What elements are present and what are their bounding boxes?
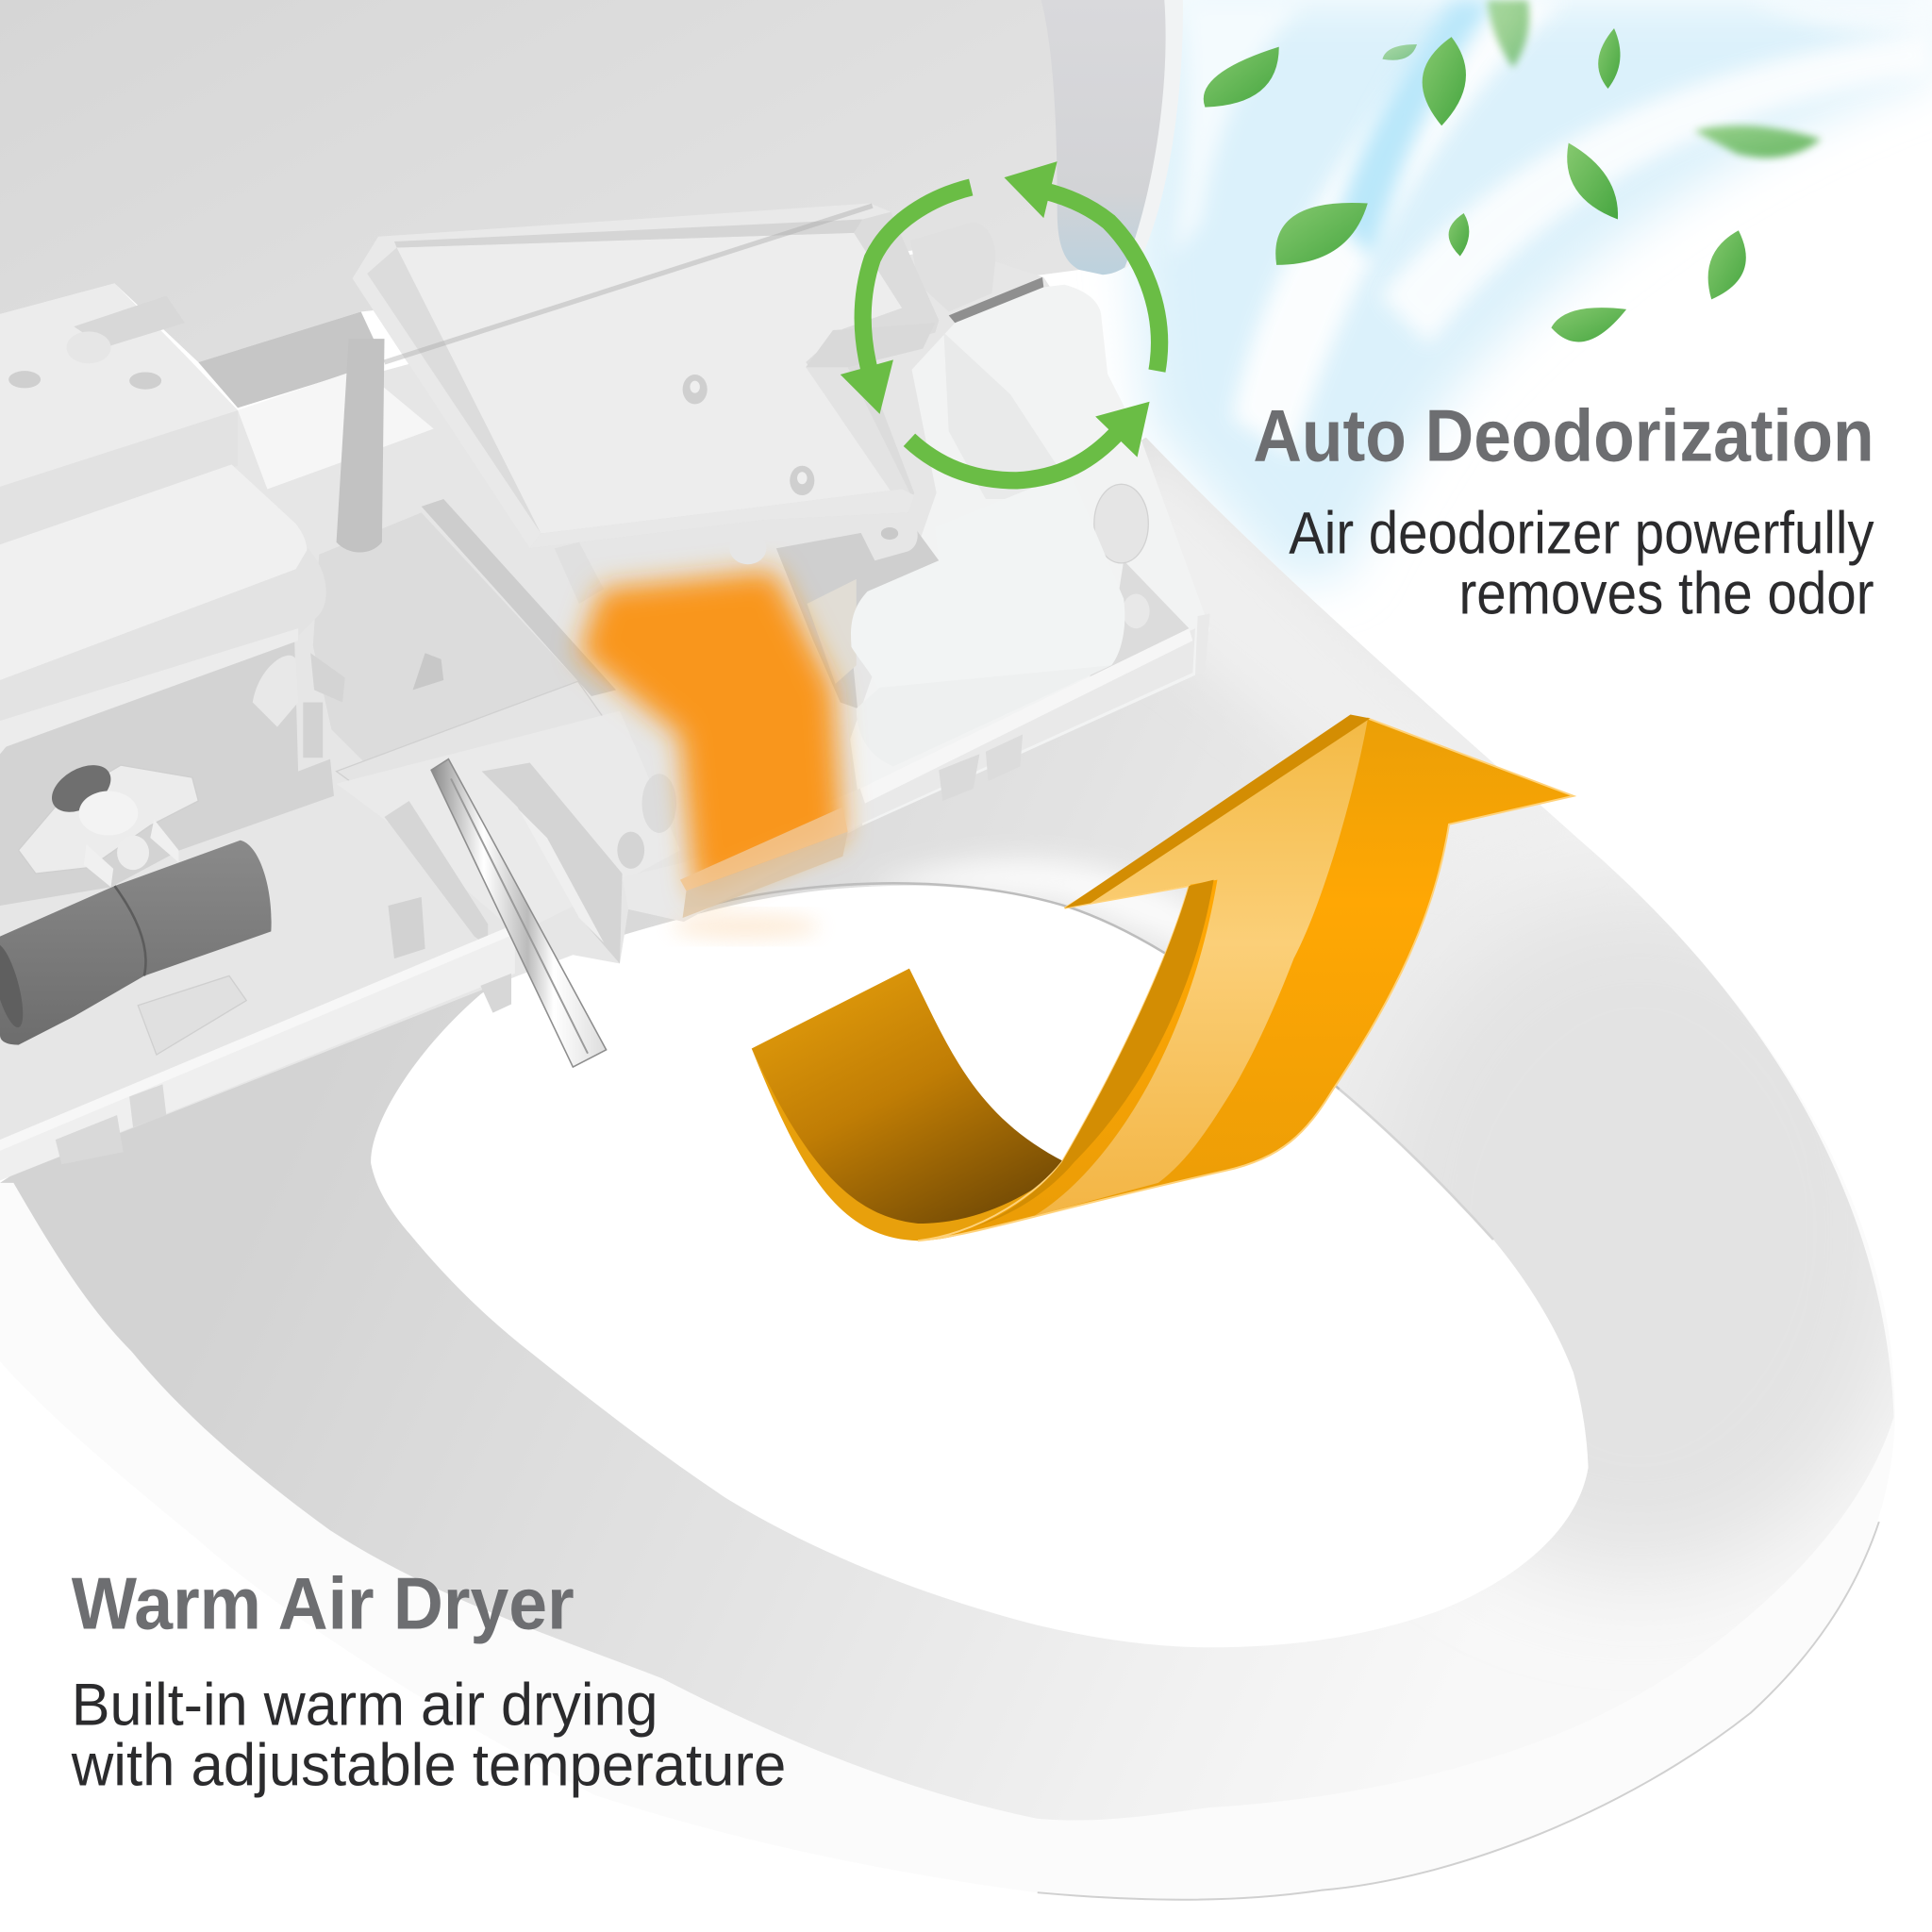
toilet seat (0, 438, 1894, 1901)
hinge ring (1094, 484, 1148, 563)
right front bar (623, 628, 1195, 922)
tray lower rim (530, 490, 914, 548)
leaf 5 (1598, 28, 1621, 89)
tray clips (555, 542, 604, 604)
hinge block (0, 283, 238, 548)
hinge cylinder (910, 222, 995, 311)
motor flange (19, 765, 198, 874)
leaves (1204, 0, 1821, 341)
right tray recess (1084, 560, 1189, 690)
warm air duct (orange) (579, 532, 848, 939)
front bar notch (56, 1115, 124, 1164)
text: deodorization description: removes the odor (1458, 560, 1874, 626)
side tab (253, 656, 298, 727)
tray ear (857, 515, 918, 560)
right white housing (850, 285, 1210, 825)
green circular arrows (841, 161, 1159, 480)
right inner gap (776, 524, 939, 708)
leaf 10 (1708, 230, 1746, 299)
leaf 8 (1275, 203, 1368, 265)
cover panel (851, 479, 1124, 702)
heading: Auto Deodorization: Auto Deodorization (1253, 393, 1874, 476)
floor post (413, 653, 443, 690)
floor rail (337, 681, 608, 808)
mechanism (0, 204, 1210, 1180)
translucent flap (943, 333, 1058, 499)
lid shadow line (385, 206, 873, 362)
lid hinge strip (198, 311, 385, 408)
flange clips (84, 844, 113, 887)
arrow highlight band (1034, 720, 1368, 1216)
upper casing (0, 464, 307, 680)
air flow (1134, 0, 1932, 579)
tray floor (397, 233, 902, 534)
arrowhead right (1095, 402, 1150, 458)
arrow dark edge top (1064, 715, 1370, 908)
heading: Warm Air Dryer: Warm Air Dryer (72, 1562, 575, 1645)
lid inner panel (1041, 0, 1171, 275)
arrow front face (918, 718, 1574, 1241)
leaf 7 (1567, 143, 1618, 219)
diagonal wall (422, 499, 616, 696)
arrow back rim (752, 1049, 1072, 1241)
seat hole rim line (684, 883, 1340, 1090)
leaf 2 (1423, 37, 1466, 125)
lower tray floor (337, 711, 680, 934)
white rail (238, 369, 434, 490)
long front bar (0, 924, 515, 1180)
wiring board (138, 975, 246, 1055)
seat hole (371, 886, 1589, 1647)
small latch (86, 680, 142, 717)
leaf 3 (1382, 44, 1417, 60)
floor (313, 512, 578, 772)
toilet lid (0, 0, 1183, 362)
small posts (388, 897, 425, 958)
arc left (863, 188, 971, 372)
base plate (0, 246, 1210, 1180)
leaf 11 (1551, 308, 1626, 341)
motor cylinder (0, 841, 272, 1045)
post over duct (729, 532, 766, 564)
text: deodorization description: Air deodorizer powerfully (1289, 500, 1874, 566)
triangle channel (385, 801, 488, 946)
leaf 9 (1449, 213, 1469, 257)
support post (337, 339, 385, 552)
text: dryer description: with adjustable temperature (71, 1733, 786, 1799)
tray top rim (353, 204, 891, 548)
seat outer bevel (0, 438, 1895, 1900)
arrow back face (752, 969, 1064, 1235)
arc bottom (909, 431, 1119, 480)
arc right (1045, 191, 1159, 371)
leaf 4 (blurred) (1487, 0, 1529, 68)
tray pins (683, 375, 708, 404)
chrome rod (431, 759, 607, 1067)
left bracket (0, 579, 61, 647)
arrowhead left (841, 359, 893, 414)
orange arrow (752, 715, 1574, 1241)
tray (353, 204, 939, 604)
arrowhead top (1004, 161, 1058, 218)
seat hole soft rim (1340, 1090, 1493, 1240)
gray case (0, 640, 334, 906)
leaf 6 (blurred) (1694, 125, 1821, 158)
tray notch wall (806, 323, 935, 494)
foot under bar (480, 974, 511, 1013)
dark hinge gap (949, 277, 1043, 323)
leaf 1 (1204, 47, 1279, 108)
arrow dark edge inner (974, 880, 1214, 1227)
seat top surface (0, 438, 1894, 1821)
tray walls (353, 204, 939, 548)
text: dryer description: Built-in warm air drying (72, 1673, 658, 1739)
